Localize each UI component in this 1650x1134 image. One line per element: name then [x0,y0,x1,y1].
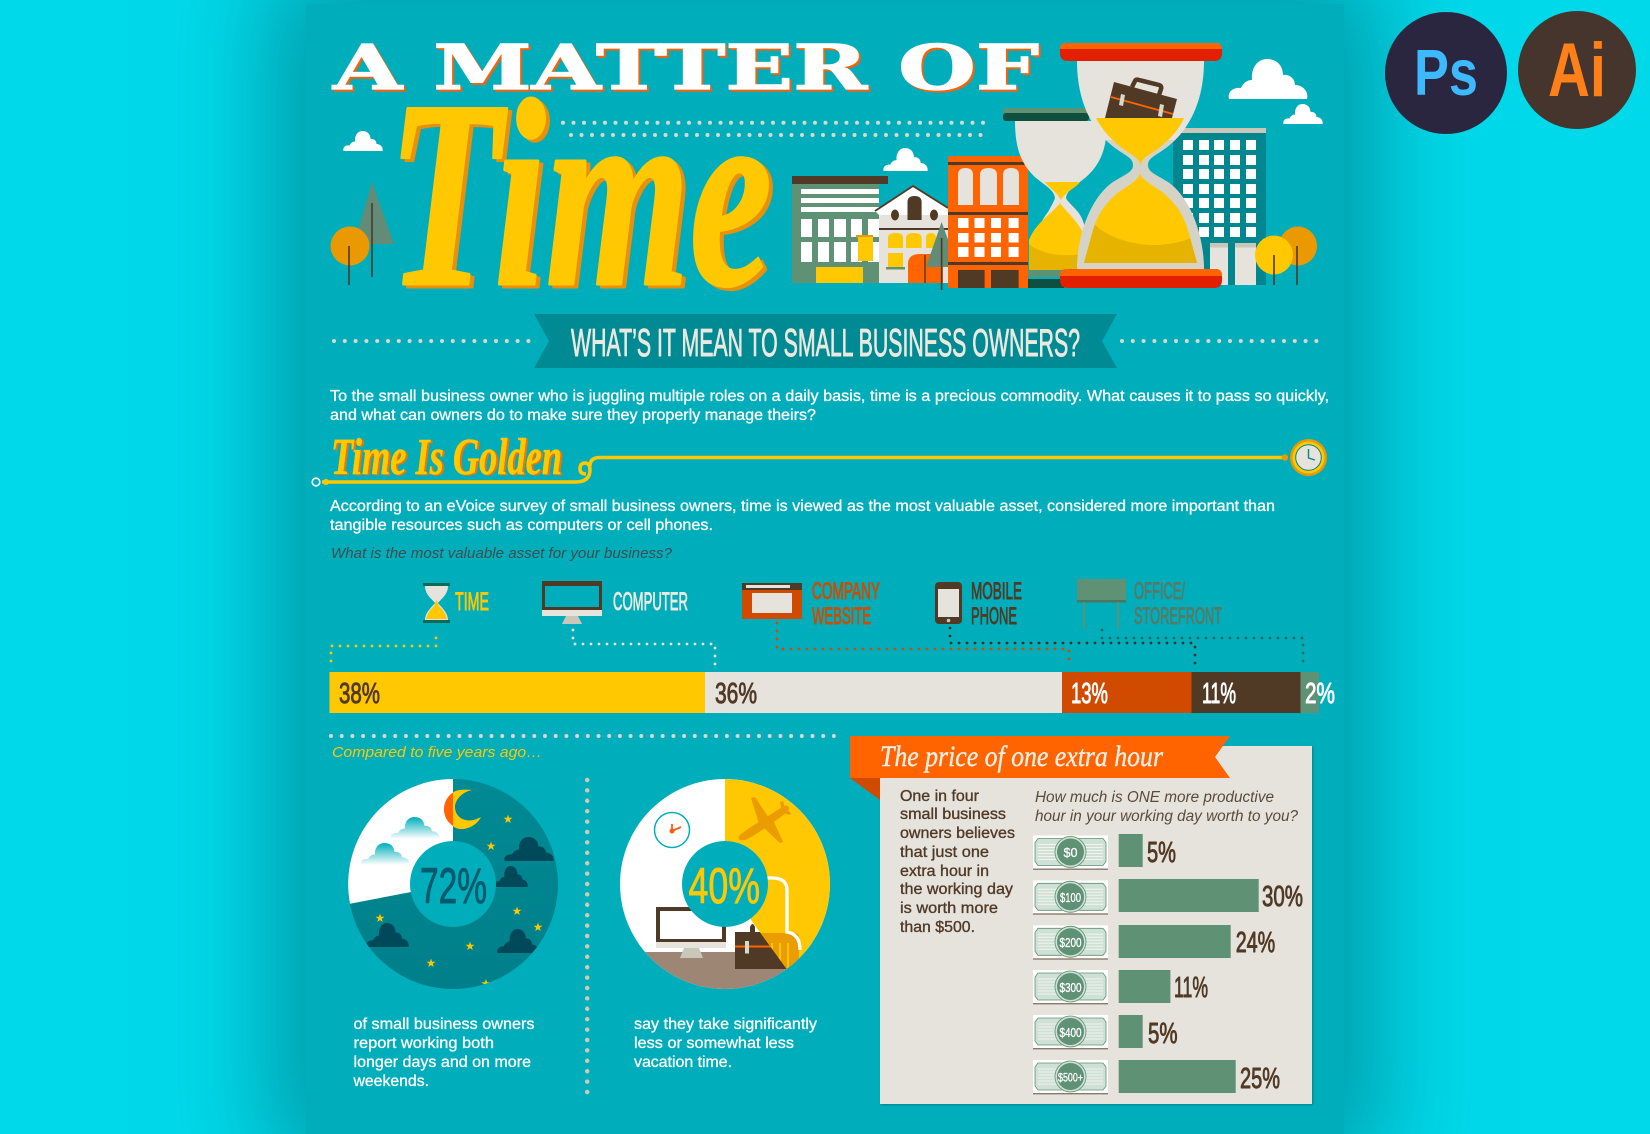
header illustration: left trees [330,182,394,285]
caption: 72%: report working both [354,1035,494,1052]
row: $200: 24% [1236,927,1275,959]
row: $400: 5% [1148,1018,1178,1050]
row: $500+: $500+ [1058,1070,1083,1084]
text: one in four: is worth more [900,900,998,917]
subtitle row: dotted rules [334,339,1325,343]
question: hour in your working day worth to you? [1035,808,1298,825]
briefcase [735,924,791,969]
row: $100: 30% [1262,881,1303,913]
legend: time: TIME [455,588,489,616]
legend: office storefront: OFFICE/ [1134,578,1185,605]
intro paragraph [330,388,1329,424]
donut chart: 40% less vacation: 40% [688,858,760,914]
intro paragraph: and what can owners do to make sure they properly manage theirs? [330,407,816,424]
stars [376,814,542,988]
text: one in four: the working day [900,881,1013,898]
stacked bar chart: most valuable asset: 11% [1202,678,1236,710]
icon: Illustrator badge [1518,11,1636,129]
header illustration: right trees [1255,226,1317,285]
legend: computer: COMPUTER [613,588,688,616]
title: A Matter Of: A MATTER OF [332,31,1039,104]
row: $500+: 25% [1240,1063,1280,1095]
survey paragraph [330,498,1275,534]
panel: price of one extra hour [850,736,1312,1104]
airplane [738,797,791,843]
legend: company website: WEBSITE [812,603,871,630]
icon: clock [1290,439,1327,476]
caption: 40%: less or somewhat less [634,1035,794,1052]
donut chart: 40% less vacation [620,779,830,992]
text: one in four: extra hour in [900,863,989,880]
donut chart: 72% longer days: 72% [420,858,487,914]
header illustration: house [875,185,958,290]
title: Time: Time [388,45,772,342]
legend: company website [742,578,880,630]
subtitle banner [534,314,1117,368]
caption: 72%: of small business owners [354,1016,535,1033]
section heading: Time Is Golden: Time Is Golden [331,429,562,486]
text: one in four: than $500. [900,919,975,936]
text: one in four [900,788,1015,936]
vertical dotted divider [585,780,589,1094]
icon: small hourglass [1003,108,1107,288]
text: one in four: One in four [900,788,979,805]
survey question: What is the most valuable asset for your business? [331,545,673,562]
crescent moon [444,790,481,829]
row: $300: 11% [1174,972,1208,1004]
caption: 72%: longer days and on more [354,1054,531,1071]
caption: 72%: weekends. [352,1073,429,1090]
stacked bar chart: most valuable asset [330,672,1335,713]
header illustration: clouds [343,59,1323,171]
caption: 72% [352,1016,535,1090]
row: $0: 5% [1147,837,1176,869]
poster panel background [306,4,1344,1134]
comparison heading: Compared to five years ago… [332,745,542,761]
row: $400: $400 [1060,1025,1082,1040]
clouds in daytime sky [360,817,440,865]
survey paragraph: tangible resources such as computers or cell phones. [330,517,713,534]
row: $400 [1033,1015,1178,1050]
row: $200: $200 [1060,935,1082,950]
row: $300 [1033,970,1208,1004]
icon: Photoshop badge: Ps [1414,36,1478,109]
stacked bar chart: most valuable asset: 13% [1071,678,1108,710]
row: $0 [1033,834,1176,870]
icon: large hourglass with briefcase [1060,43,1222,288]
question [1035,789,1298,825]
legend: mobile phone: MOBILE [971,578,1022,605]
ribbon fold [850,778,880,800]
briefcase in hourglass [1105,80,1177,118]
stacked bar chart: most valuable asset: 38% [339,678,380,710]
suitcase [760,933,799,969]
night clouds [366,837,554,953]
wall clock [654,812,690,848]
header illustration: right teal tower [1173,128,1266,285]
ribbon: The price of one extra hour [880,740,1163,773]
subtitle banner: WHAT’S IT MEAN TO SMALL BUSINESS OWNERS? [571,322,1080,365]
text: one in four: that just one [900,844,989,861]
row: $0: $0 [1064,845,1078,860]
row: $300: $300 [1060,980,1082,995]
text: one in four: owners believes [900,825,1015,842]
row: $100 [1033,879,1303,915]
legend: time [423,583,489,623]
legend: mobile phone [935,578,1022,630]
survey paragraph: According to an eVoice survey of small business owners, time is viewed as the most valuable asset, considered more important than [330,498,1275,515]
vacation sector [725,779,830,969]
row: $100: $100 [1060,890,1081,905]
legend: company website: COMPANY [812,578,880,605]
legend: mobile phone: PHONE [971,603,1017,630]
question: How much is ONE more productive [1035,789,1274,806]
icon: Illustrator badge: Ai [1548,28,1606,113]
caption: 40%: say they take significantly [634,1016,817,1033]
legend: computer [542,581,688,624]
legend: office storefront: STOREFRONT [1134,603,1222,630]
row: $200 [1033,925,1275,960]
dotted connectors from legend to bar [331,623,1303,668]
row: $500+ [1033,1060,1280,1095]
decorative dotted title rows [563,123,985,135]
timeline rule with clock [312,439,1327,486]
header illustration: orange building [948,156,1028,288]
caption: 40% [634,1016,817,1071]
caption: 40%: vacation time. [634,1054,732,1071]
floor [645,952,805,989]
icon: Photoshop badge [1385,12,1507,134]
legend: office storefront [1077,578,1222,630]
donut chart: 72% longer days [348,779,558,989]
stacked bar chart: most valuable asset: 36% [715,678,757,710]
dotted divider above comparison section [331,734,834,738]
computer [656,907,726,958]
text: one in four: small business [900,806,1006,823]
intro paragraph: To the small business owner who is juggling multiple roles on a daily basis, time is a precious commodity. What causes it to pass so quickly, [330,388,1329,405]
ribbon [850,736,1230,778]
stacked bar chart: most valuable asset: 2% [1305,678,1335,710]
header illustration: green office building [792,176,888,283]
